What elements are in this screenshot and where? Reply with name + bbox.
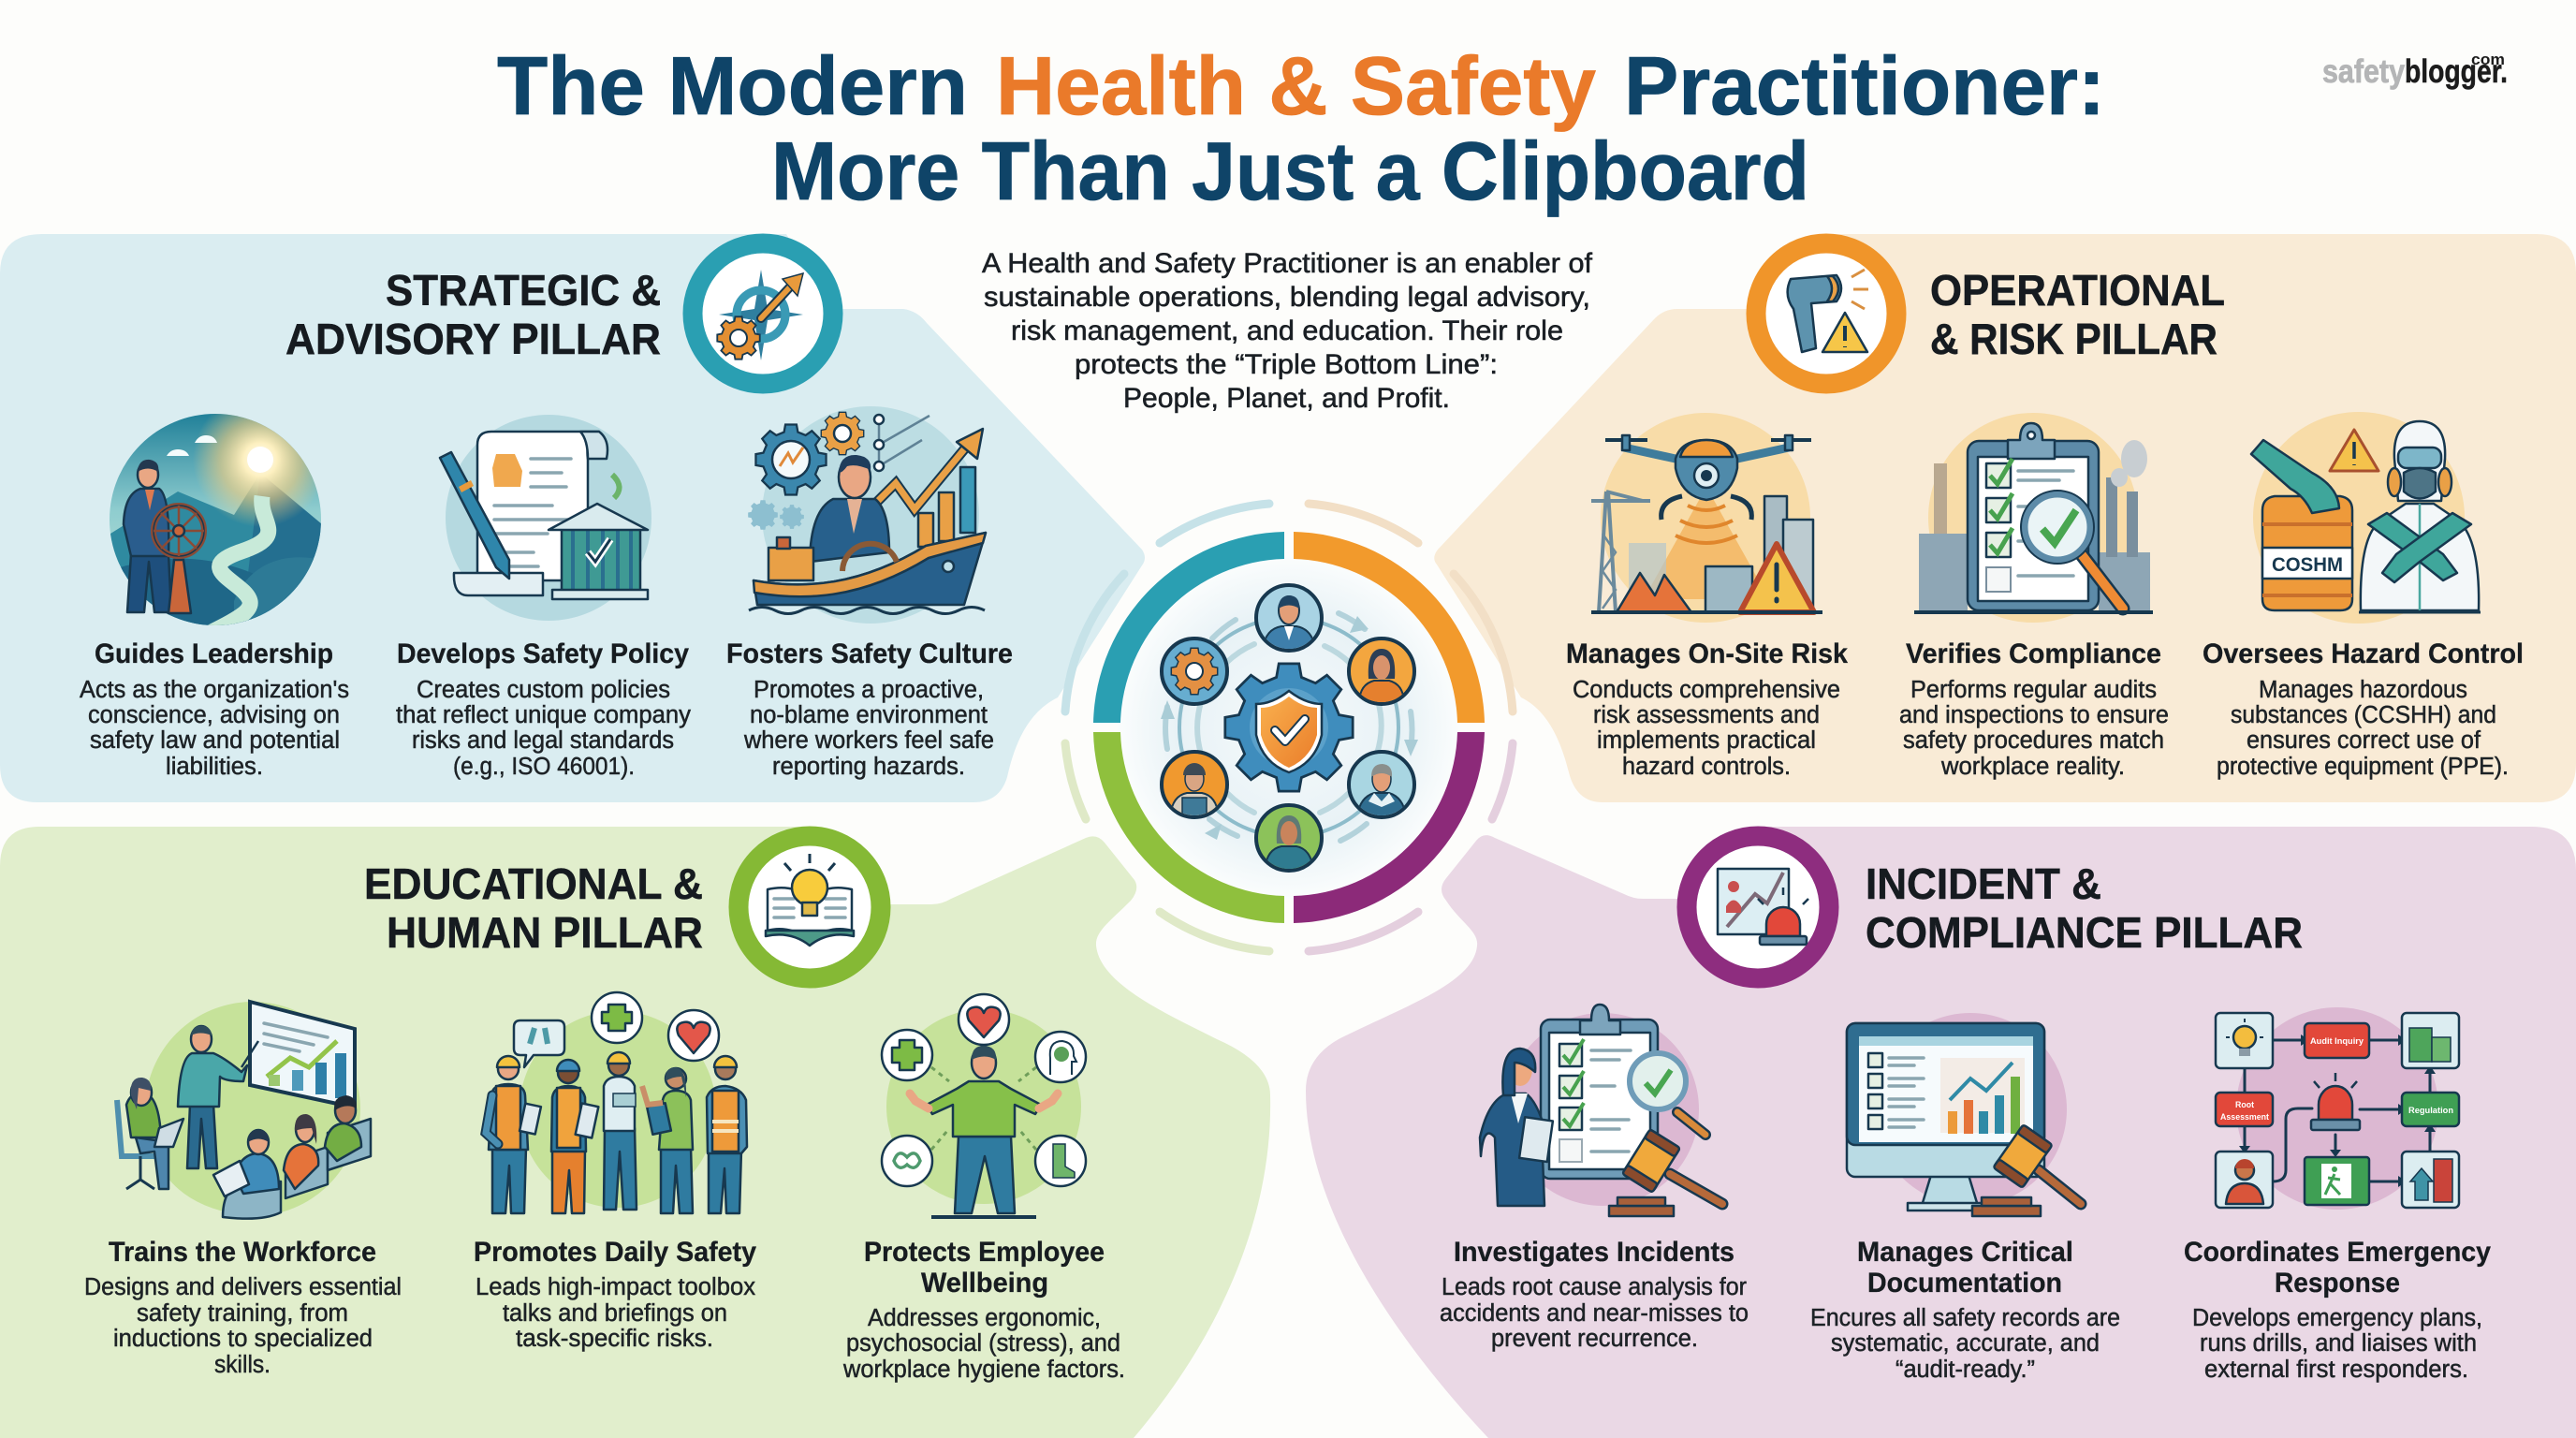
icon: drone scanning a construction site bbox=[1591, 413, 1822, 623]
hub node: bottom-right man avatar bbox=[1349, 752, 1414, 817]
item: manages critical documentation bbox=[1810, 1013, 2120, 1383]
item: develops safety policy bbox=[396, 415, 691, 780]
panel: incident and compliance pillar bbox=[1306, 827, 2576, 1438]
panel: operational and risk pillar bbox=[1434, 234, 2576, 802]
item title: manages critical documentation: Documentation bbox=[1867, 1268, 2062, 1299]
heading: strategic and advisory pillar: ADVISORY PILLAR bbox=[285, 315, 661, 363]
icon: clipboard checklist with magnifier over factory bbox=[1914, 413, 2153, 623]
heading: operational and risk pillar: OPERATIONAL bbox=[1930, 266, 2225, 315]
item title: protects employee wellbeing bbox=[864, 1237, 1105, 1299]
heading: strategic and advisory pillar bbox=[285, 266, 661, 363]
item title: oversees hazard control: Oversees Hazard Control bbox=[2203, 638, 2524, 669]
logo: safetyblogger.com bbox=[2322, 51, 2508, 90]
item description: investigates incidents bbox=[1440, 1274, 1749, 1352]
item description: oversees hazard control bbox=[2217, 677, 2509, 780]
item title: protects employee wellbeing: Protects Employee bbox=[864, 1237, 1105, 1268]
item title: coordinates emergency response: Response bbox=[2275, 1268, 2400, 1299]
item description: verifies compliance: safety procedures match bbox=[1903, 727, 2164, 754]
item description: manages critical documentation: systematic, accurate, and bbox=[1831, 1330, 2100, 1357]
item: investigates incidents bbox=[1440, 1005, 1749, 1352]
icon: framed incident chart with alarm beacon bbox=[1687, 836, 1829, 978]
heading: incident and compliance pillar: COMPLIANCE PILLAR bbox=[1866, 908, 2303, 957]
icon: five workers in a toolbox talk with speech bubbles bbox=[486, 992, 747, 1213]
title: Practitioner: bbox=[1624, 39, 2105, 132]
item title: coordinates emergency response: Coordinates Emergency bbox=[2184, 1237, 2491, 1268]
item title: fosters safety culture: Fosters Safety Culture bbox=[726, 638, 1013, 669]
panel: educational and human pillar bbox=[0, 827, 1270, 1438]
item description: manages critical documentation: Encures all safety records are bbox=[1810, 1305, 2120, 1331]
item description: manages critical documentation bbox=[1810, 1305, 2120, 1383]
heading: operational and risk pillar: & RISK PILLAR bbox=[1930, 315, 2217, 363]
item description: investigates incidents: accidents and near-misses to bbox=[1440, 1300, 1749, 1327]
item: protects employee wellbeing bbox=[842, 994, 1125, 1383]
icon: compass with gear and arrow bbox=[693, 243, 833, 384]
item description: oversees hazard control: substances (CCSHH) and bbox=[2231, 702, 2496, 728]
item description: oversees hazard control: ensures correct use of bbox=[2247, 727, 2481, 754]
item description: develops safety policy: that reflect unique company bbox=[396, 702, 691, 728]
hub node: bottom-left worker avatar bbox=[1162, 752, 1227, 817]
item description: fosters safety culture: no-blame environment bbox=[750, 702, 988, 728]
item: fosters safety culture bbox=[726, 406, 1013, 780]
icon: leader steering a ship wheel toward the sun bbox=[110, 414, 321, 625]
item description: oversees hazard control: protective equipment (PPE). bbox=[2217, 754, 2509, 780]
item description: guides leadership: liabilities. bbox=[166, 754, 263, 780]
heading: incident and compliance pillar bbox=[1866, 859, 2303, 957]
item description: manages on-site risk bbox=[1573, 677, 1840, 780]
item description: guides leadership: Acts as the organization's bbox=[80, 677, 349, 703]
intro text block: risk management, and education. Their role bbox=[1011, 315, 1563, 346]
item description: manages on-site risk: implements practical bbox=[1597, 727, 1816, 754]
icon: emergency response flow diagram bbox=[2216, 1007, 2459, 1210]
item description: promotes daily safety: task-specific risks. bbox=[516, 1326, 713, 1352]
item description: trains the workforce: safety training, from bbox=[137, 1300, 348, 1327]
icon: open book with light bulb bbox=[739, 836, 881, 978]
item title: manages on-site risk: Manages On-Site Risk bbox=[1566, 638, 1848, 669]
item description: develops safety policy: Creates custom policies bbox=[417, 677, 670, 703]
item description: fosters safety culture: reporting hazards. bbox=[772, 754, 965, 780]
item description: verifies compliance: workplace reality. bbox=[1940, 754, 2125, 780]
logo: safetyblogger.com: blogger. bbox=[2405, 53, 2508, 90]
central hub diagram bbox=[1065, 504, 1513, 951]
item description: fosters safety culture: where workers feel safe bbox=[743, 727, 994, 754]
item description: investigates incidents: Leads root cause analysis for bbox=[1442, 1274, 1747, 1300]
item description: oversees hazard control: Manages hazordous bbox=[2259, 677, 2467, 703]
item description: coordinates emergency response: external first responders. bbox=[2204, 1357, 2468, 1383]
item description: trains the workforce bbox=[84, 1274, 402, 1378]
item title: manages critical documentation bbox=[1857, 1237, 2073, 1299]
item description: verifies compliance: Performs regular audits bbox=[1910, 677, 2157, 703]
item title: guides leadership: Guides Leadership bbox=[95, 638, 333, 669]
item description: investigates incidents: prevent recurrence. bbox=[1491, 1326, 1698, 1352]
item title: coordinates emergency response bbox=[2184, 1237, 2491, 1299]
item title: promotes daily safety: Promotes Daily Safety bbox=[474, 1237, 756, 1268]
icon: emergency response flow diagram: Regulation bbox=[2408, 1106, 2453, 1115]
hub: connecting cycle arrows bbox=[1161, 613, 1418, 841]
logo: safetyblogger.com: safety bbox=[2322, 53, 2405, 90]
hub node: bottom woman avatar bbox=[1256, 805, 1322, 871]
item description: develops safety policy bbox=[396, 677, 691, 780]
item description: protects employee wellbeing: Addresses ergonomic, bbox=[868, 1305, 1101, 1331]
icon: emergency response flow diagram: Audit Inquiry bbox=[2310, 1036, 2364, 1046]
item description: manages on-site risk: risk assessments and bbox=[1593, 702, 1820, 728]
icon: policy scroll, pen and building bbox=[440, 415, 651, 621]
item: trains the workforce bbox=[84, 1002, 402, 1378]
icon: emergency response flow diagram: Root bbox=[2235, 1100, 2254, 1109]
item: oversees hazard control bbox=[2203, 412, 2524, 780]
item description: guides leadership bbox=[80, 677, 349, 780]
item description: promotes daily safety bbox=[476, 1274, 755, 1352]
icon: worker surrounded by wellbeing symbols bbox=[882, 994, 1086, 1217]
title: More Than Just a Clipboard bbox=[771, 125, 1809, 217]
icon: scanner gun and warning triangle bbox=[1756, 243, 1896, 384]
intro text block: protects the “Triple Bottom Line”: bbox=[1075, 349, 1498, 380]
item description: promotes daily safety: talks and briefings on bbox=[503, 1300, 727, 1327]
hub node: gear bbox=[1162, 638, 1227, 704]
title: Health & Safety bbox=[996, 39, 1596, 132]
title: The Modern bbox=[497, 39, 968, 132]
item description: protects employee wellbeing bbox=[842, 1305, 1125, 1383]
item title: develops safety policy: Develops Safety Policy bbox=[397, 638, 689, 669]
intro text block: A Health and Safety Practitioner is an enabler of bbox=[982, 248, 1593, 279]
item description: fosters safety culture: Promotes a proactive, bbox=[754, 677, 984, 703]
icon: presenter with screen training seated workers bbox=[117, 1002, 371, 1219]
icon: investigator with clipboard, magnifier and gavel bbox=[1480, 1005, 1722, 1216]
heading: educational and human pillar: HUMAN PILLAR bbox=[387, 908, 703, 957]
panel: strategic and advisory pillar bbox=[0, 234, 1145, 802]
item title: verifies compliance: Verifies Compliance bbox=[1906, 638, 2161, 669]
item description: guides leadership: safety law and potential bbox=[90, 727, 340, 754]
item description: trains the workforce: inductions to specialized bbox=[113, 1326, 373, 1352]
item description: trains the workforce: Designs and delivers essential bbox=[84, 1274, 402, 1300]
item description: develops safety policy: (e.g., ISO 46001). bbox=[453, 754, 635, 780]
intro text block bbox=[982, 248, 1593, 414]
icon: monitor with records dashboard and gavel bbox=[1847, 1013, 2081, 1216]
hub: central gear with shield and check bbox=[1225, 664, 1353, 791]
hub: inner disc bbox=[1118, 556, 1460, 899]
item description: manages critical documentation: “audit-ready.” bbox=[1895, 1357, 2035, 1383]
item description: coordinates emergency response bbox=[2192, 1305, 2482, 1383]
item title: protects employee wellbeing: Wellbeing bbox=[921, 1268, 1048, 1299]
heading: operational and risk pillar bbox=[1930, 266, 2225, 363]
item description: coordinates emergency response: Develops emergency plans, bbox=[2192, 1305, 2482, 1331]
item: promotes daily safety bbox=[474, 992, 756, 1352]
item description: fosters safety culture bbox=[743, 677, 994, 780]
item description: manages on-site risk: Conducts comprehensive bbox=[1573, 677, 1840, 703]
logo: safetyblogger.com: com bbox=[2471, 51, 2505, 68]
intro text block: sustainable operations, blending legal advisory, bbox=[984, 282, 1590, 313]
title bbox=[497, 39, 2105, 217]
intro text block: People, Planet, and Profit. bbox=[1123, 383, 1450, 414]
item description: coordinates emergency response: runs drills, and liaises with bbox=[2200, 1330, 2477, 1357]
heading: educational and human pillar bbox=[364, 859, 703, 957]
item title: trains the workforce: Trains the Workforce bbox=[109, 1237, 376, 1268]
item: verifies compliance bbox=[1899, 413, 2169, 780]
item description: promotes daily safety: Leads high-impact toolbox bbox=[476, 1274, 755, 1300]
hub node: top manager avatar bbox=[1256, 585, 1322, 651]
hub node: top-right woman avatar bbox=[1349, 638, 1414, 704]
item description: verifies compliance bbox=[1899, 677, 2169, 780]
item: manages on-site risk bbox=[1566, 413, 1848, 780]
hub: four coloured ring segments bbox=[1093, 532, 1485, 923]
heading: educational and human pillar: EDUCATIONAL & bbox=[364, 859, 703, 908]
item description: guides leadership: conscience, advising on bbox=[88, 702, 340, 728]
heading: strategic and advisory pillar: STRATEGIC & bbox=[386, 266, 661, 315]
icon: leader steering a ship with rising chart bbox=[748, 406, 986, 624]
icon: emergency response flow diagram: Assessment bbox=[2220, 1112, 2269, 1122]
icon: COSHH drum, gloved hand and person in protective suit: COSHM bbox=[2272, 554, 2343, 576]
item title: investigates incidents: Investigates Incidents bbox=[1454, 1237, 1734, 1268]
item description: protects employee wellbeing: workplace hygiene factors. bbox=[842, 1357, 1125, 1383]
hub: faint outer arcs bbox=[1065, 504, 1513, 951]
item description: verifies compliance: and inspections to ensure bbox=[1899, 702, 2169, 728]
item description: trains the workforce: skills. bbox=[214, 1352, 271, 1378]
item description: manages on-site risk: hazard controls. bbox=[1622, 754, 1791, 780]
item description: protects employee wellbeing: psychosocial (stress), and bbox=[846, 1330, 1120, 1357]
item: coordinates emergency response bbox=[2184, 1007, 2491, 1383]
item: guides leadership bbox=[80, 392, 349, 780]
heading: incident and compliance pillar: INCIDENT & bbox=[1866, 859, 2101, 908]
item description: develops safety policy: risks and legal standards bbox=[412, 727, 674, 754]
item title: manages critical documentation: Manages Critical bbox=[1857, 1237, 2073, 1268]
icon: COSHH drum, gloved hand and person in protective suit bbox=[2251, 412, 2481, 624]
